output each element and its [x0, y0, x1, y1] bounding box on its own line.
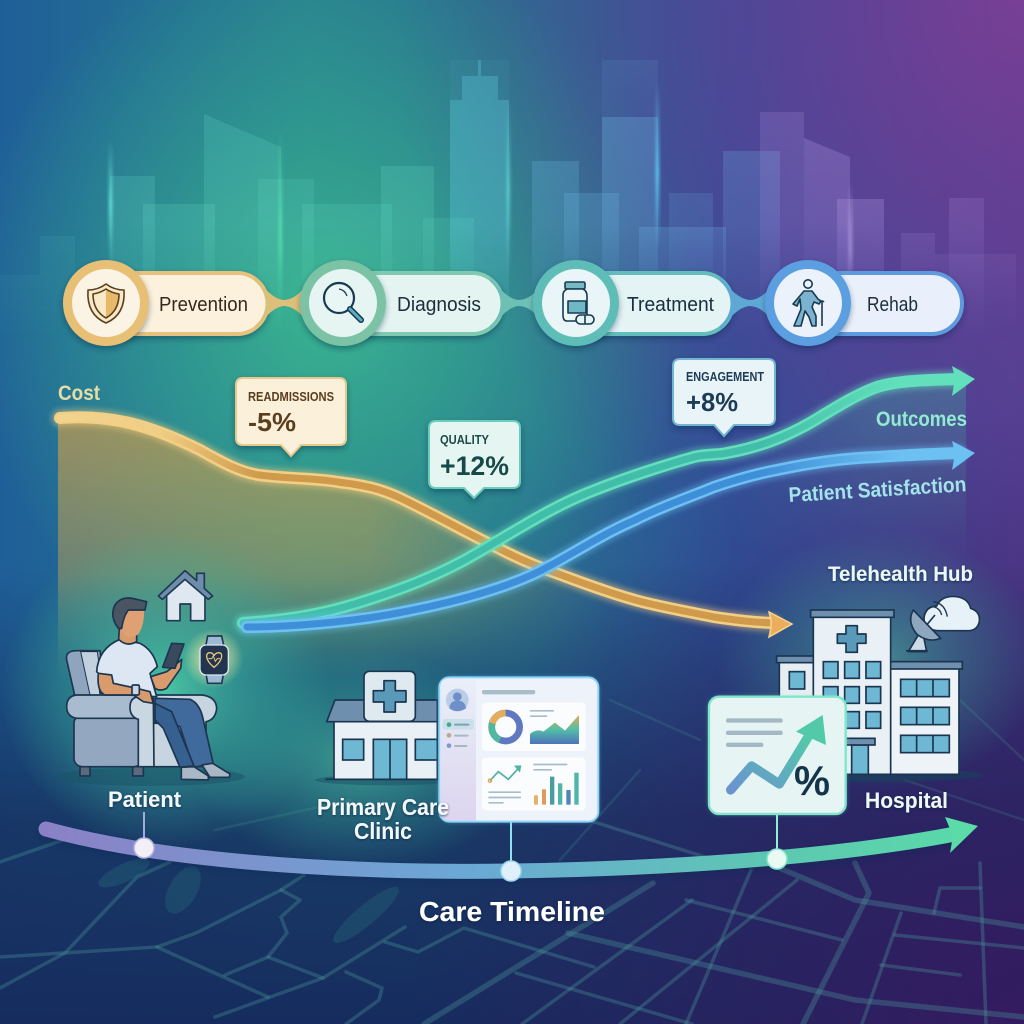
timeline node: percent card [767, 849, 787, 869]
icon: medicine bottle and pill [563, 282, 594, 324]
label: Outcomes: Outcomes [876, 408, 967, 431]
curve: outcomes (rising) [243, 366, 975, 623]
stage: Diagnosis [300, 260, 543, 346]
callout: engagement: +8% [686, 387, 738, 417]
callout: quality: QUALITY [440, 432, 489, 447]
label: Primary Care Clinic: Primary Care [317, 794, 449, 820]
outcomes area fill under curve [778, 385, 966, 522]
armchair [66, 651, 217, 776]
stage: Treatment: Treatment [627, 294, 714, 316]
callout: quality: +12% [440, 451, 509, 481]
hospital illustration [770, 596, 983, 782]
icon: person walking with cane [793, 280, 824, 326]
person seated [97, 598, 230, 780]
callout: readmissions [236, 378, 346, 456]
cost area fill under curve [58, 423, 583, 665]
stage: Rehab [765, 260, 962, 346]
label: Care Timeline: Care Timeline [419, 896, 605, 927]
stage: Rehab: Rehab [867, 294, 918, 316]
curve: cost (declining) [60, 417, 792, 637]
callout: readmissions: READMISSIONS [248, 389, 334, 404]
icon: house [158, 571, 213, 621]
percent growth card [709, 697, 846, 814]
label: Cost: Cost [58, 382, 100, 405]
callout: engagement [673, 359, 775, 436]
label: Patient Satisfaction: Patient Satisfaction [788, 473, 967, 507]
care timeline arrow [46, 817, 978, 875]
stage: Prevention [63, 260, 308, 346]
callout: engagement: ENGAGEMENT [686, 369, 764, 384]
primary care clinic illustration [315, 671, 458, 785]
timeline node: dashboard [501, 861, 521, 881]
timeline stem: patient [143, 812, 145, 840]
patient illustration [55, 571, 245, 786]
icon: satellite dish and cloud [906, 596, 979, 652]
stage: Prevention: Prevention [159, 294, 248, 316]
stage: Treatment [533, 260, 774, 346]
stage: Diagnosis: Diagnosis [397, 294, 481, 316]
glow: patient area [0, 530, 330, 850]
dashboard stem line [510, 820, 512, 864]
callout: quality [429, 421, 520, 498]
label: Patient: Patient [108, 787, 182, 812]
line chart [490, 767, 520, 781]
glow: hospital area [715, 530, 1024, 790]
callout: readmissions: -5% [248, 407, 296, 437]
rising arrow [731, 728, 813, 790]
donut chart [492, 713, 520, 741]
city skyline backdrop [40, 60, 1016, 299]
care stage pipeline [63, 260, 962, 346]
icon: magnifying glass [324, 283, 361, 320]
label: Telehealth Hub: Telehealth Hub [828, 563, 973, 586]
curve: patient satisfaction (rising) [247, 441, 975, 627]
area chart [530, 715, 579, 744]
light beams on building edges [107, 89, 854, 288]
label: Primary Care Clinic: Clinic [354, 818, 412, 844]
percent card stem [776, 812, 778, 850]
icon: smartwatch with heart [183, 628, 243, 688]
label: Hospital: Hospital [865, 788, 948, 813]
icon: shield [88, 284, 124, 323]
dashboard panel [439, 677, 598, 822]
blurred park shapes on the map [95, 853, 405, 950]
bar chart [534, 773, 579, 805]
percent growth card: % [794, 757, 830, 804]
city map road network [0, 700, 1024, 1024]
glow: clinic area [190, 650, 530, 870]
timeline node: patient [134, 838, 154, 858]
